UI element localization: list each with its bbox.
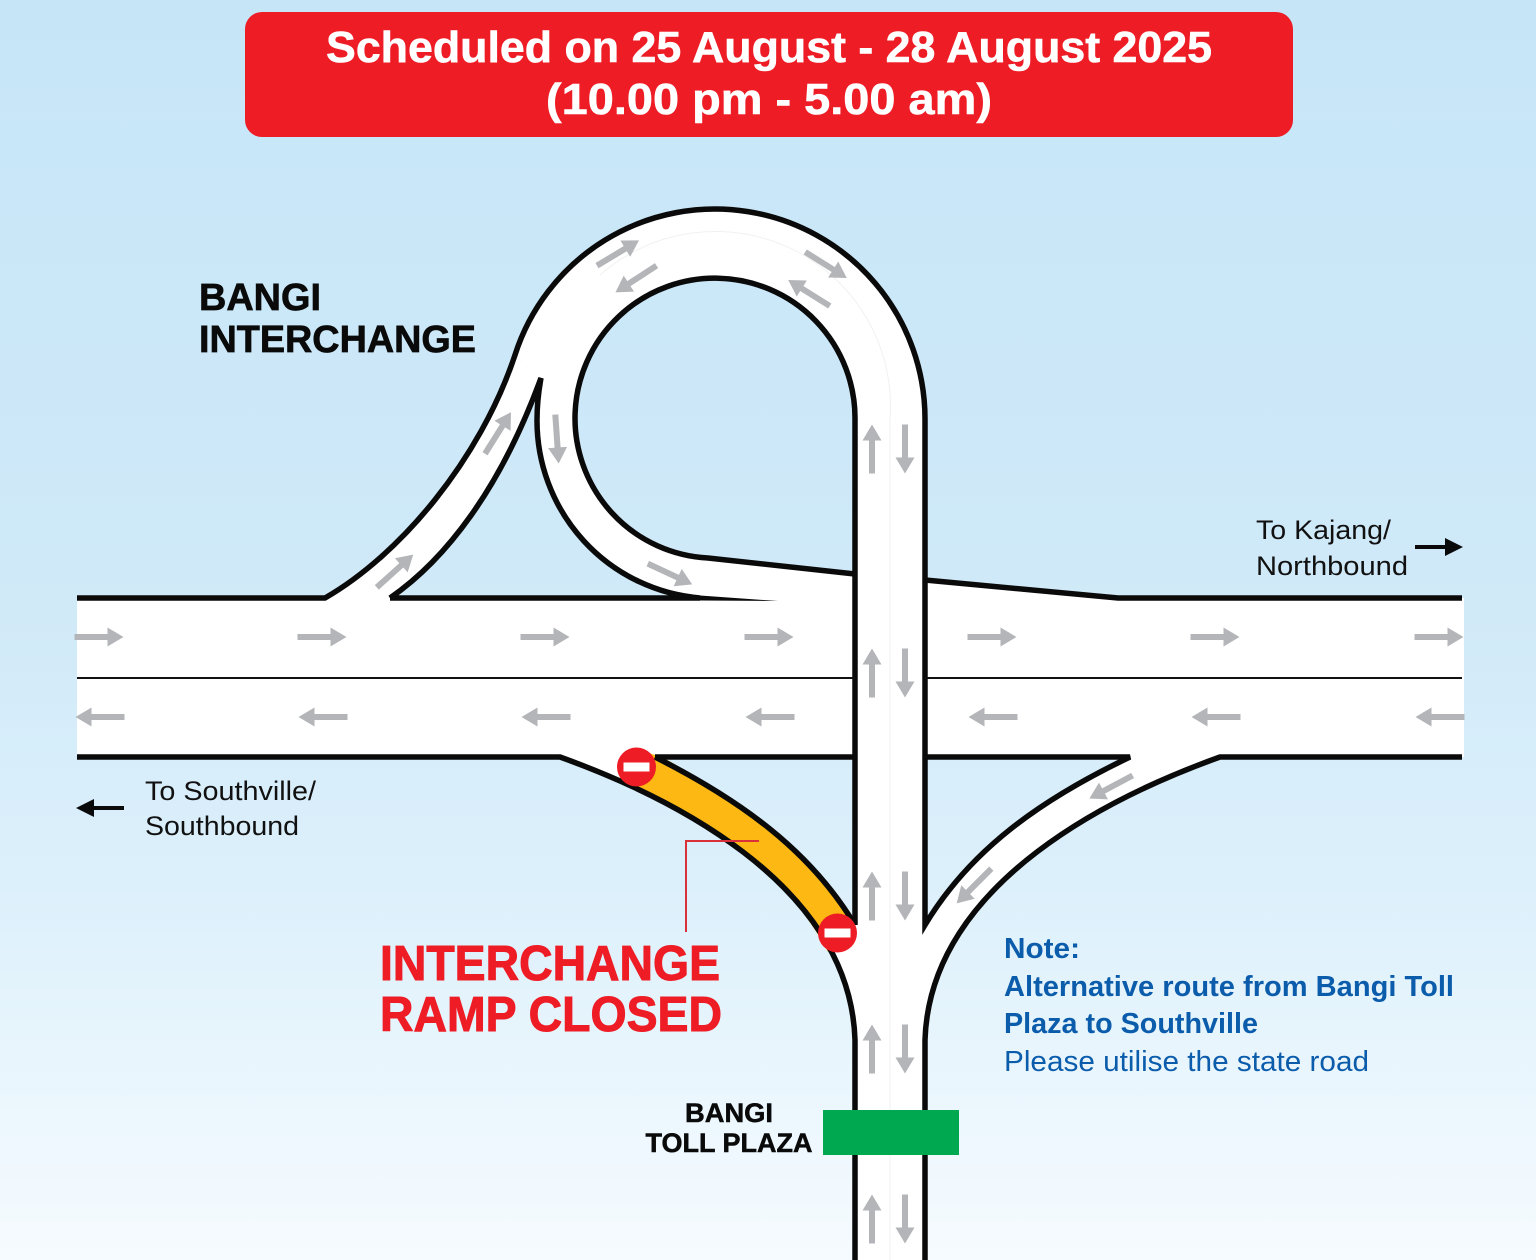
direction label: Southville — [145, 776, 317, 841]
taper point — [700, 596, 778, 601]
date banner: (10.00 pm - 5.00 am) — [546, 75, 992, 124]
westbound arrows — [76, 708, 1464, 726]
on-ramp surface — [325, 355, 541, 600]
closed ramp surface — [560, 757, 855, 1040]
closure heading — [380, 937, 722, 1042]
note — [1004, 933, 1454, 1078]
loop and ramp arrows — [370, 232, 1137, 910]
direction label: Southville: To Southville/ — [145, 776, 317, 806]
direction label: Southville: Southbound — [145, 811, 299, 841]
date banner: Scheduled on 25 August - 28 August 2025 — [326, 23, 1212, 72]
icon: no entry top — [617, 748, 656, 786]
road network — [77, 209, 1464, 1260]
eastbound arrows — [74, 628, 1464, 646]
direction label: Kajang: To Kajang/ — [1256, 515, 1392, 545]
date banner — [245, 12, 1293, 137]
northbound arrows — [862, 424, 882, 1244]
toll plaza label — [646, 1098, 812, 1158]
main highway surface — [77, 575, 1464, 757]
interchange label: INTERCHANGE — [199, 319, 476, 361]
median line — [77, 677, 1462, 679]
road centre lines — [600, 231, 891, 1260]
note: Note: — [1004, 933, 1080, 965]
icon: no entry bottom — [818, 914, 857, 952]
callout leader line — [686, 841, 759, 932]
direction label: Kajang — [1256, 515, 1408, 581]
toll plaza block — [823, 1110, 959, 1155]
note: Plaza to Southville — [1004, 1008, 1258, 1040]
note: Please utilise the state road — [1004, 1046, 1369, 1078]
closure heading: INTERCHANGE — [380, 937, 720, 991]
toll plaza label: TOLL PLAZA — [646, 1128, 812, 1158]
direction label: Kajang: Northbound — [1256, 551, 1408, 581]
vertical road surface — [855, 420, 925, 1260]
interchange label — [199, 277, 476, 361]
southbound arrows — [896, 424, 914, 1244]
traffic arrows — [74, 232, 1464, 1244]
closed ramp highlight — [622, 752, 855, 952]
road edges — [77, 209, 1462, 1260]
arrow: to Kajang — [1415, 538, 1463, 556]
toll plaza label: BANGI — [685, 1098, 773, 1128]
loop surface — [515, 209, 925, 602]
right merge ramp surface — [925, 757, 1220, 1040]
interchange label: BANGI — [199, 277, 321, 319]
note: Alternative route from Bangi Toll — [1004, 971, 1454, 1003]
arrow: to Southville — [76, 799, 124, 817]
closure heading: RAMP CLOSED — [380, 988, 722, 1042]
